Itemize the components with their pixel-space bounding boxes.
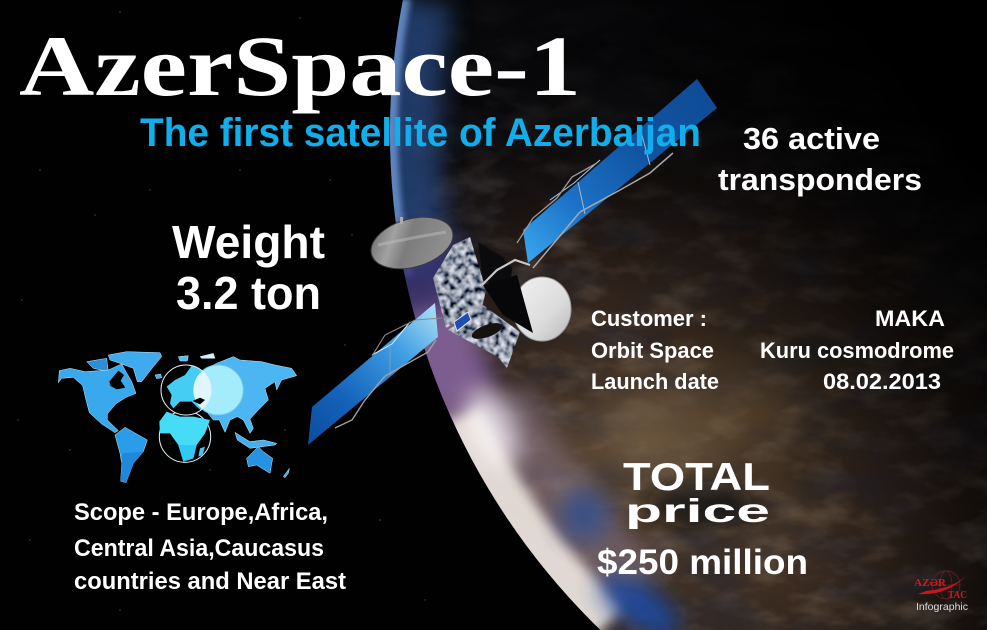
highlight circle: Central Asia [193,365,243,415]
transponders text: transponders [718,162,922,197]
transponders text: 36 active [743,121,880,156]
weight text [172,216,325,319]
subtitle: The first satellite of Azerbaijan [140,111,701,155]
satellite [308,79,717,445]
transponders text [718,121,922,197]
logo: AzerTAC infographic: AZƏR [914,577,947,589]
world map [58,352,297,483]
continents: Asia, Africa, Europe and Australia [159,353,297,478]
total price: $250 million [597,543,808,582]
solar panel: lower left [308,303,442,445]
total price [597,456,808,582]
title: AzerSpace-1 [19,18,581,114]
highlight circle: Europe [160,364,212,416]
spacecraft body [433,237,533,368]
continents: Americas [58,352,162,483]
total price: TOTAL [623,456,770,499]
logo: AzerTAC infographic [914,571,968,613]
details table: Customer : [591,306,707,331]
details table: Launch date [591,369,719,394]
total price: price [625,492,770,529]
antenna dish: white [513,277,571,341]
scope text: Scope - Europe,Africa, [74,499,328,526]
details table: Kuru cosmodrome [760,338,954,363]
logo: AzerTAC infographic: TAC [948,589,967,601]
solar panel: upper right [517,79,717,268]
antenna dish: grey [365,208,459,278]
details table: MAKA [875,306,945,331]
scope text: countries and Near East [74,568,346,595]
details table: Orbit Space [591,338,714,363]
scope text: Central Asia,Caucasus [74,535,324,562]
logo: AzerTAC infographic: Infographic [916,601,968,613]
weight text: Weight [172,216,325,268]
highlight circle: Africa [159,411,211,462]
weight text: 3.2 ton [176,267,321,319]
planet Earth [380,0,987,630]
details table: 08.02.2013 [823,369,941,394]
scope text [74,499,346,595]
details table [591,306,954,394]
